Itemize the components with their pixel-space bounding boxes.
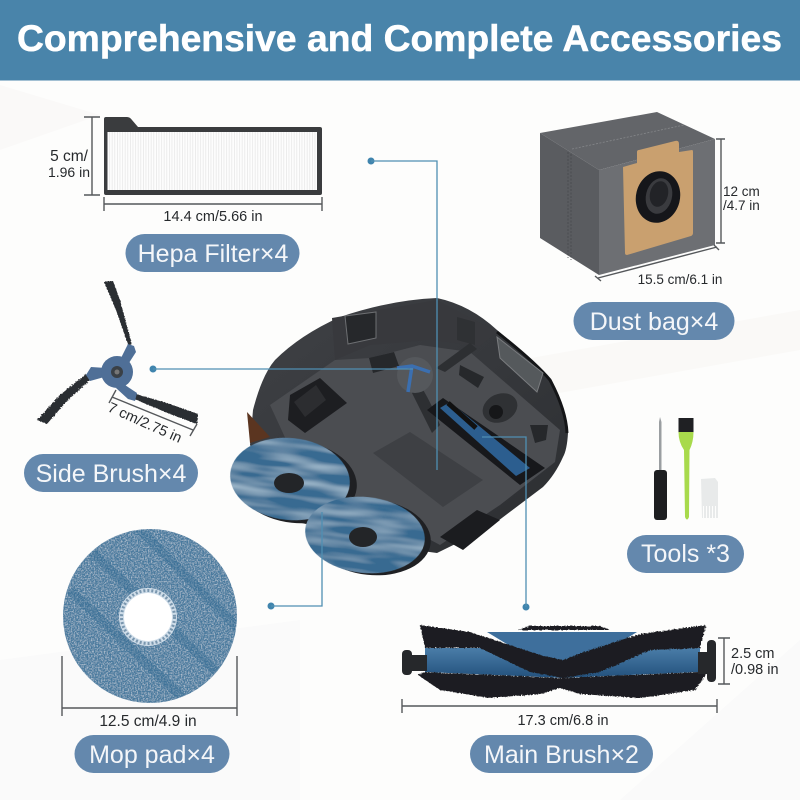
callout: side brush to robot: [150, 366, 413, 372]
robot vacuum underside: [226, 298, 568, 581]
robot body: [250, 298, 568, 553]
icon: cleaning brush: [678, 418, 694, 520]
dimension: mop pad width: 12.5 cm/4.9 in: [99, 713, 197, 730]
label: dust bag: [574, 302, 734, 340]
robot side brush mount: [397, 343, 477, 433]
label: tools: [627, 535, 744, 573]
robot underside plate: [270, 345, 560, 545]
dimension: bag height: [716, 139, 760, 243]
label: side brush: Side Brush×4: [36, 460, 186, 488]
icon: main brush: [402, 625, 716, 698]
icon: mop pad: [63, 525, 240, 705]
panel: dust bag: [540, 112, 760, 340]
panel: mop pad: [62, 525, 240, 773]
icon: dust bag: [540, 112, 715, 275]
callout: mop pad to robot: [268, 512, 322, 610]
label: mop pad: Mop pad×4: [89, 741, 215, 769]
dimension: filter width: 14.4 cm/5.66 in: [163, 209, 263, 225]
robot main brush slot: [427, 398, 545, 485]
dimension: brush height: [718, 638, 779, 684]
title: Comprehensive and Complete Accessories: [17, 18, 782, 59]
callout: main brush to robot: [482, 437, 530, 610]
label: hepa filter: Hepa Filter×4: [138, 240, 288, 268]
label: dust bag: Dust bag×4: [590, 308, 718, 336]
panel: main brush: [402, 625, 779, 773]
dimension: filter height: 5 cm/: [50, 148, 89, 165]
robot left wheel: [288, 378, 347, 433]
label: side brush: [24, 454, 198, 492]
robot front sensors: [345, 312, 548, 443]
dimension: filter height: [48, 117, 100, 195]
header banner: [0, 0, 800, 80]
dimension: filter height: 1.96 in: [48, 164, 90, 180]
icon: screwdriver: [654, 417, 667, 520]
icon: side brush: [37, 281, 198, 424]
dimension: bag width: [595, 245, 722, 287]
dimension: brush length: [402, 699, 717, 729]
dimension: brush length: 17.3 cm/6.8 in: [517, 713, 609, 729]
robot front bumper: [332, 300, 497, 360]
dimension: brush height: /0.98 in: [731, 662, 779, 678]
robot mop disc right: [301, 491, 429, 579]
dimension: side brush length: 7 cm/2.75 in: [105, 400, 184, 447]
dimension: bag width: 15.5 cm/6.1 in: [638, 272, 722, 287]
panel: hepa filter: [48, 117, 322, 272]
icon: hepa filter: [104, 117, 322, 195]
dimension: bag height: /4.7 in: [723, 198, 760, 213]
dimension: mop pad width: [62, 656, 237, 730]
dimension: brush height: 2.5 cm: [731, 646, 775, 662]
robot brown accent: [247, 412, 270, 443]
robot mop disc left: [226, 432, 354, 526]
robot dust panel: [373, 432, 483, 507]
robot caster wheel: [478, 388, 522, 428]
panel: tools: [627, 417, 744, 573]
label: main brush: Main Brush×2: [484, 741, 639, 769]
label: hepa filter: [126, 234, 300, 272]
dimension: bag height: 12 cm: [723, 184, 760, 199]
robot right wheel: [440, 510, 500, 550]
callout: filter to robot: [368, 158, 437, 470]
label: tools: Tools *3: [641, 540, 730, 568]
label: mop pad: [74, 735, 230, 773]
panel: side brush: [24, 281, 198, 492]
robot mop disc shadows: [231, 435, 435, 581]
icon: comb: [701, 478, 718, 518]
label: main brush: [470, 735, 653, 773]
dimension: filter width: [104, 197, 322, 225]
